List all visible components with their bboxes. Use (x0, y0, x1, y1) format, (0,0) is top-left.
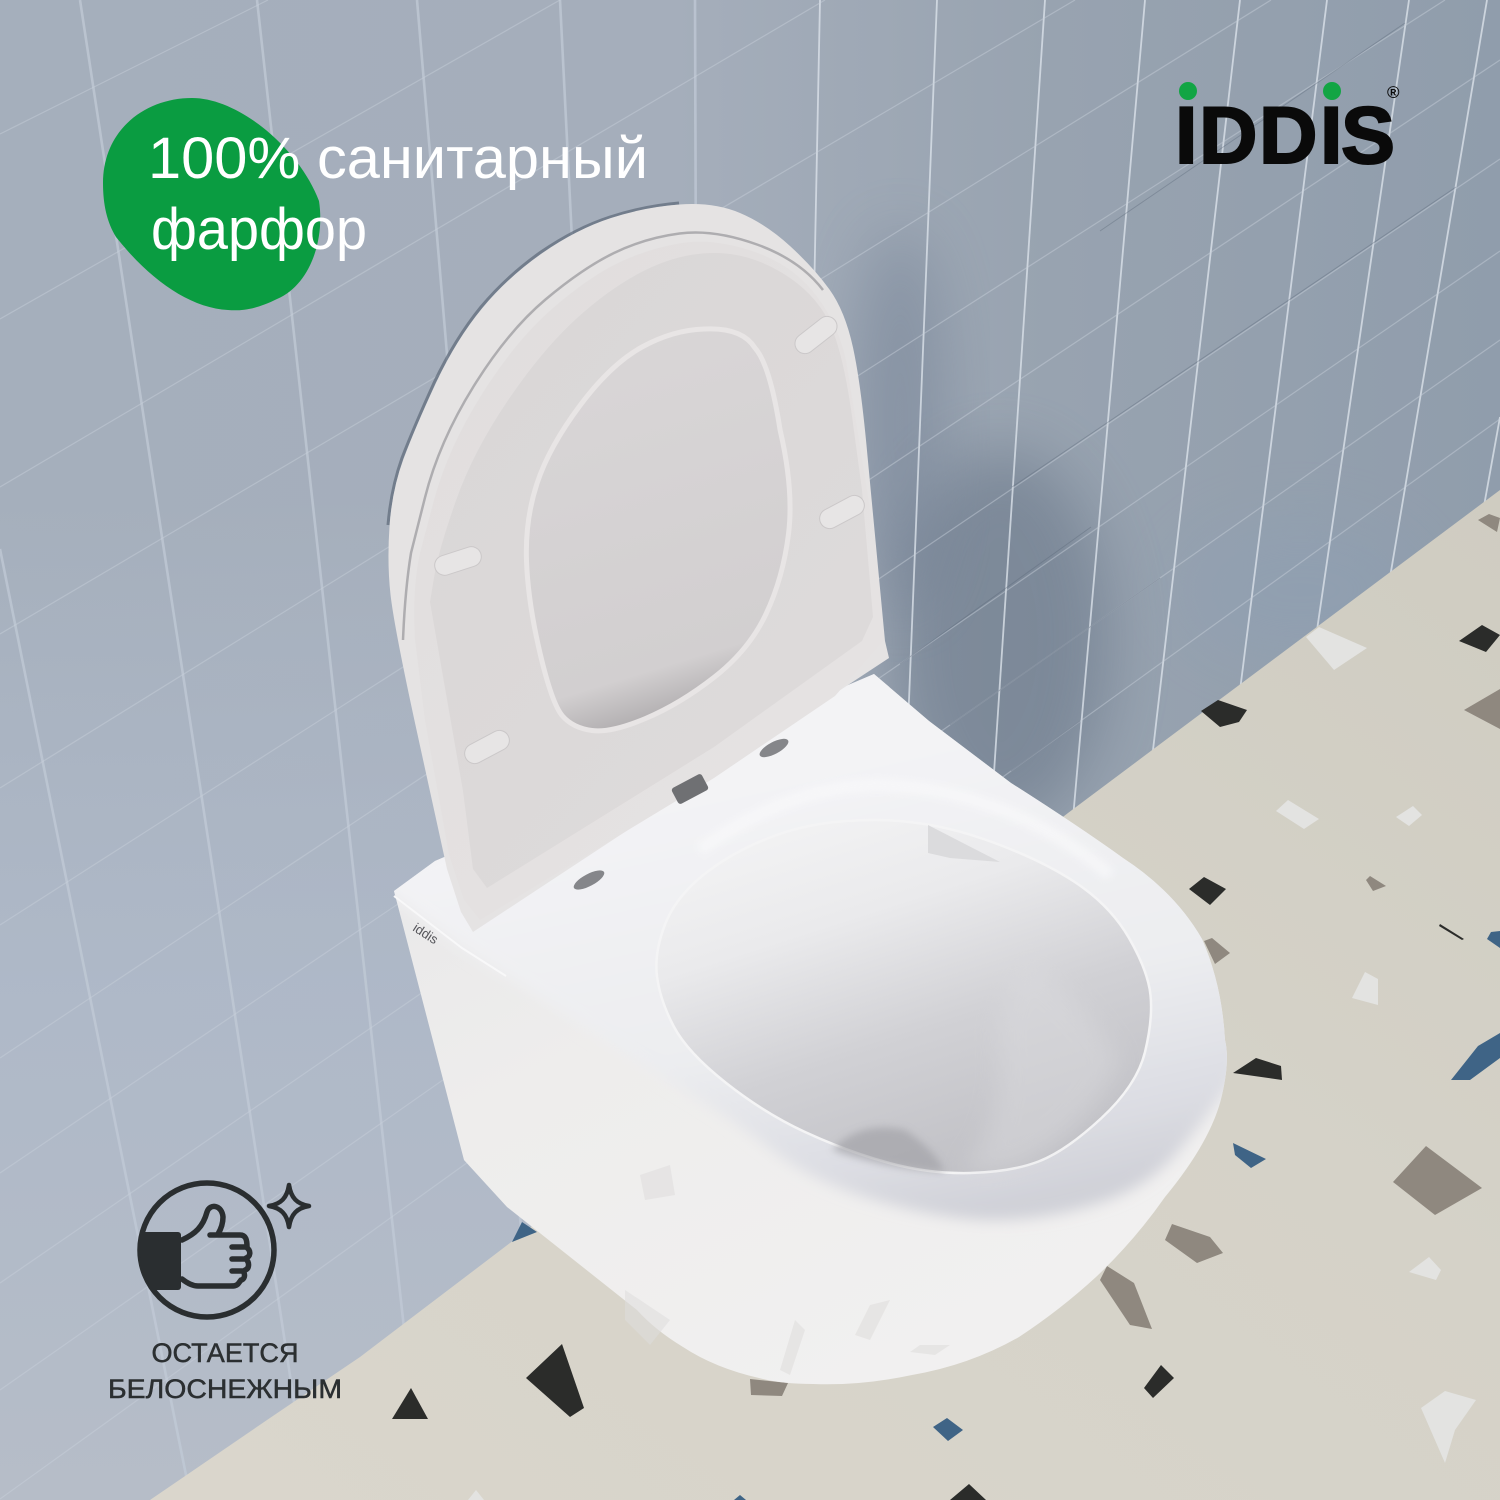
toilet seat lid, raised (388, 203, 889, 932)
heading: фарфор (151, 197, 367, 262)
icon: thumbs up with sparkle (135, 1183, 309, 1317)
green blob behind heading (103, 98, 320, 310)
icon: sparkle (269, 1185, 309, 1227)
caption (108, 1338, 342, 1404)
seat pads (432, 312, 868, 767)
heading: 100% санитарный (148, 126, 648, 191)
side face highlight edge (394, 896, 506, 976)
bowl lighter swirl (960, 960, 1120, 1173)
faint chip reflections on the body (625, 1165, 950, 1375)
lid opening (526, 329, 790, 731)
groove between seat and lid (403, 232, 823, 640)
toilet bowl (370, 660, 1250, 1384)
bowl body (394, 674, 1227, 1384)
logo: IDDIS: ® (1387, 83, 1400, 102)
rim notch (928, 825, 1000, 862)
seat front face (414, 242, 884, 920)
caption: ОСТАЕТСЯ (152, 1338, 298, 1368)
floor with terrazzo chips (150, 490, 1500, 1500)
contact shadow along the upper edge (388, 203, 679, 525)
bowl trap shadow (832, 1128, 945, 1172)
heading (148, 126, 648, 262)
caption: БЕЛОСНЕЖНЫМ (108, 1374, 342, 1404)
hinge fittings (571, 735, 791, 893)
brand mark on rim: iddis (410, 920, 441, 947)
upper rim highlight (700, 785, 1110, 875)
seat silhouette (388, 204, 889, 932)
seat inner panel (430, 253, 873, 888)
logo: IDDIS: IDDIS (1175, 91, 1395, 181)
bowl interior (656, 820, 1151, 1173)
rim top surface with soft front edge (370, 660, 1250, 1220)
